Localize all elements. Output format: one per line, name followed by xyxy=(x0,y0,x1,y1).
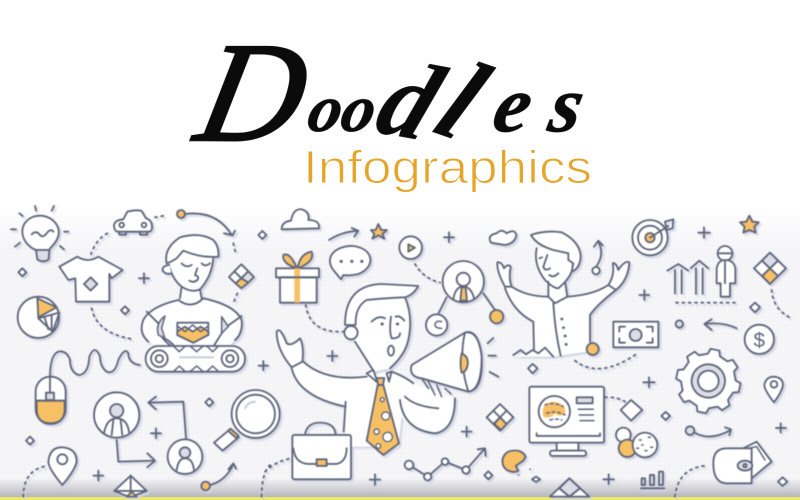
icon: star xyxy=(371,224,387,239)
icon: diamond cluster bottom xyxy=(114,476,147,497)
icon: diamond cluster xyxy=(754,253,786,284)
arrow: up curve xyxy=(592,241,603,274)
small diamond xyxy=(484,471,492,479)
icon: star xyxy=(740,216,759,233)
icon: dollar coin: $ xyxy=(754,329,766,352)
face details xyxy=(539,255,558,276)
arms and torso lines xyxy=(505,285,616,357)
megaphone xyxy=(411,332,498,397)
title: Doodles: o xyxy=(302,74,350,146)
arrow: orange dot to arrowhead xyxy=(201,463,236,490)
title: Doodles: e xyxy=(486,61,541,149)
icon: diamond cluster xyxy=(487,404,513,431)
left hand xyxy=(277,330,303,367)
network user circle xyxy=(426,261,503,336)
title: Doodles: d xyxy=(360,38,461,164)
panel: left doodles xyxy=(11,206,280,497)
icon: cloud xyxy=(282,209,319,229)
icon: briefcase xyxy=(292,423,351,479)
main character with megaphone xyxy=(277,284,498,455)
small circle xyxy=(676,320,683,328)
icon: diamond cluster bottom xyxy=(550,478,589,497)
icon: wallet xyxy=(713,442,772,483)
waving character xyxy=(497,232,629,357)
icon: diamond cluster xyxy=(229,264,254,288)
head xyxy=(536,245,572,303)
panel: right doodles xyxy=(497,216,792,497)
icon: banknote xyxy=(613,322,658,347)
body outlines xyxy=(292,362,455,433)
panel: centre doodles xyxy=(265,209,535,485)
icon: location pin xyxy=(764,377,783,402)
plus signs xyxy=(603,227,786,484)
head xyxy=(355,297,410,372)
plus signs xyxy=(93,273,268,481)
growth arrows xyxy=(667,261,708,294)
icon: gift xyxy=(276,252,319,303)
arrows between users xyxy=(117,397,186,467)
hair xyxy=(345,284,418,325)
icon: target xyxy=(632,219,673,255)
icon: dollar coin xyxy=(745,325,774,354)
collar xyxy=(367,370,392,383)
icon: user circle small xyxy=(168,439,202,474)
doodle artwork xyxy=(11,206,792,497)
icon: speech bubble xyxy=(330,246,370,279)
body xyxy=(292,362,455,447)
ear xyxy=(344,326,358,339)
icon: coin cluster xyxy=(616,428,657,457)
title: Doodles: l xyxy=(416,39,509,164)
icon: location pin xyxy=(48,447,77,485)
right hand xyxy=(608,262,629,290)
icon: gear xyxy=(670,343,746,419)
small diamonds xyxy=(18,231,266,445)
title: Doodles: D xyxy=(184,14,321,172)
icon: computer mouse xyxy=(36,377,66,424)
arrow to star xyxy=(329,228,358,240)
icon: car xyxy=(114,210,152,235)
title: Doodles: s xyxy=(541,61,592,149)
icon: t-shirt xyxy=(59,257,123,302)
face outline xyxy=(536,248,572,303)
arrow: curved xyxy=(686,426,731,437)
icon: cookie xyxy=(502,451,535,478)
head outline xyxy=(355,297,410,371)
icon: bar chart xyxy=(641,472,664,488)
face details xyxy=(372,316,404,338)
icon: pie chart xyxy=(18,297,59,338)
subtitle: Infographics: Infographics xyxy=(303,141,592,193)
plus signs xyxy=(327,232,472,485)
icon: shirt diamond xyxy=(84,277,97,291)
small diamonds xyxy=(528,303,787,486)
shirt buttons xyxy=(562,319,566,344)
icon: user circle large xyxy=(94,392,139,438)
icon: play button xyxy=(399,236,422,259)
icon: magnifier xyxy=(214,390,280,451)
left hand and arm xyxy=(497,262,512,287)
mouse cable xyxy=(50,350,140,377)
tie xyxy=(367,378,399,455)
arrow: orange dot curve xyxy=(155,210,236,255)
hair xyxy=(531,232,581,272)
orange dot xyxy=(587,343,599,355)
background: stippled band xyxy=(0,205,800,500)
icon: diamond xyxy=(621,400,642,421)
conveyor belt xyxy=(146,346,245,372)
dashed connectors xyxy=(265,264,440,472)
mouth xyxy=(388,346,394,356)
arrow to small circle xyxy=(704,319,737,330)
icon: standing person xyxy=(717,246,735,297)
dashed connectors xyxy=(575,290,792,497)
torso fill xyxy=(505,285,616,357)
line graph xyxy=(405,448,486,480)
icon: light bulb xyxy=(11,206,68,261)
icon: monitor xyxy=(529,387,604,456)
icon: cloud small xyxy=(490,231,516,245)
dashed connectors xyxy=(23,233,270,497)
eyes xyxy=(382,319,398,328)
title: Doodles: o xyxy=(335,74,383,146)
person on conveyor xyxy=(142,235,242,347)
